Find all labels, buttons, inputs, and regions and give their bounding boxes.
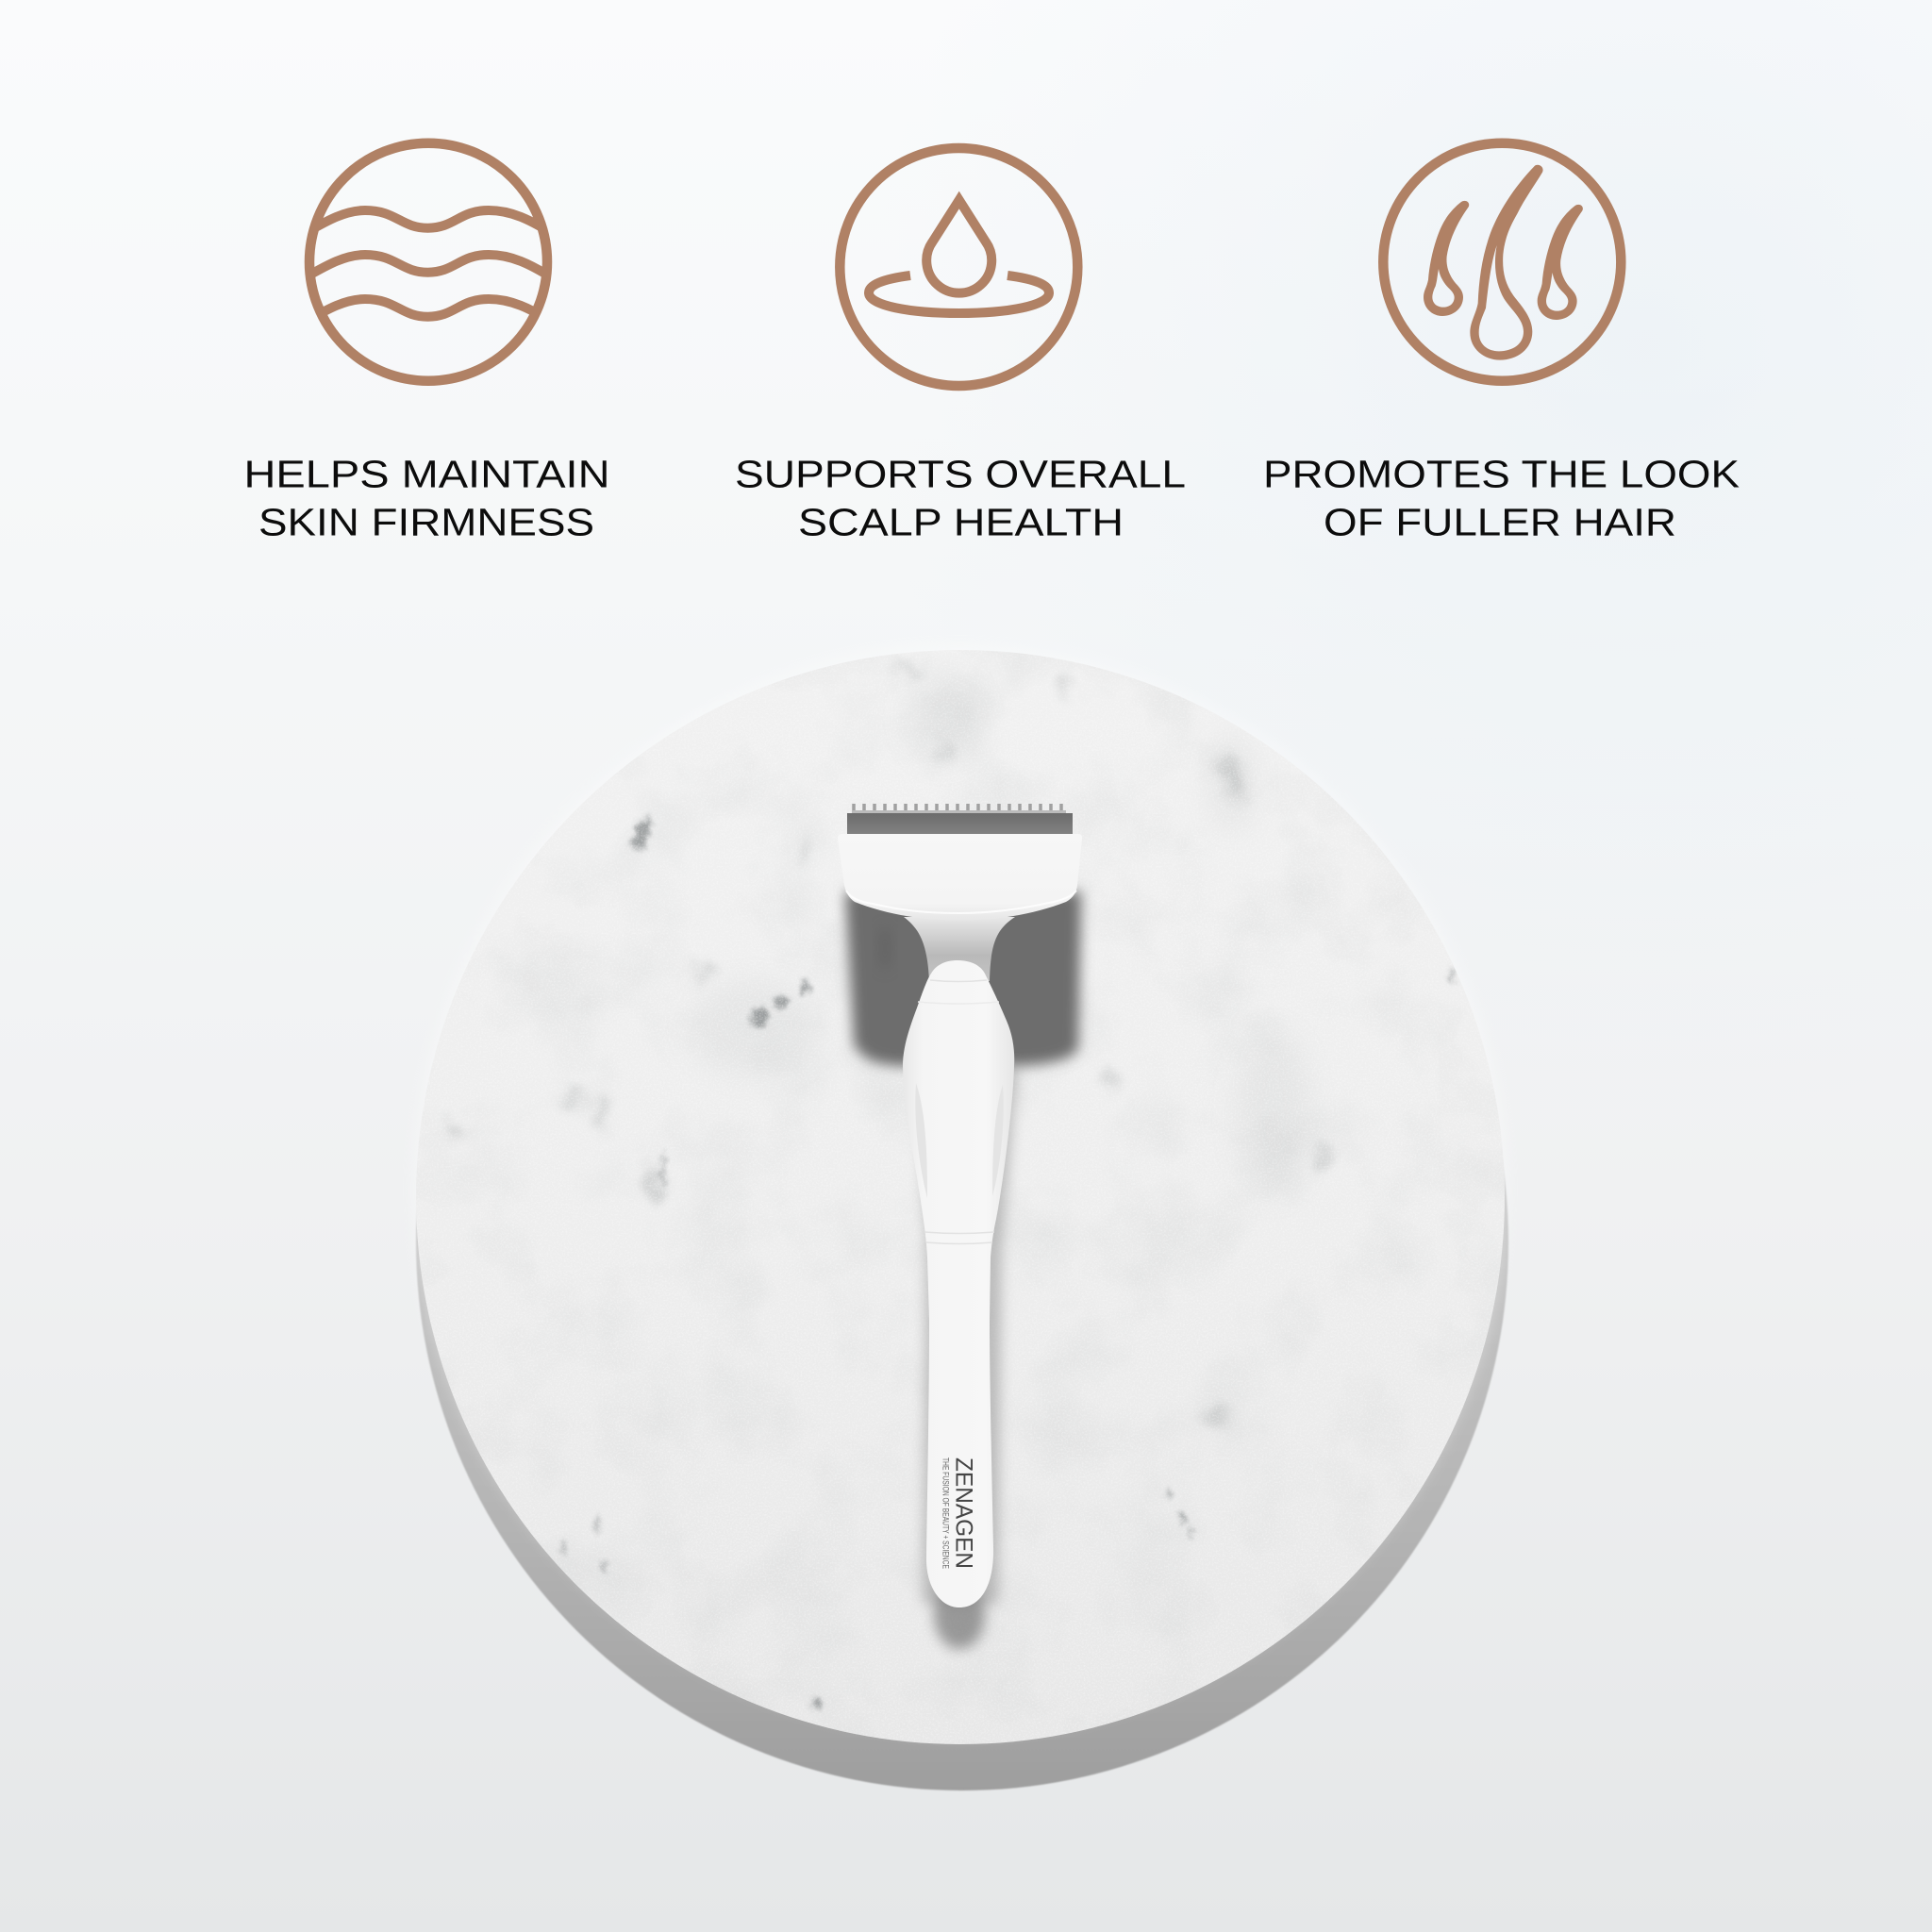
brand text on handle: THE FUSION OF BEAUTY + SCIENCE — [941, 1457, 951, 1569]
label: supports overall scalp health — [735, 453, 1186, 544]
disc face — [416, 650, 1505, 1744]
label: supports overall scalp health: SUPPORTS OVERALL — [735, 453, 1186, 496]
shadow below the handle tip — [934, 1581, 985, 1649]
label: promotes the look of fuller hair: OF FULLER HAIR — [1324, 501, 1676, 544]
icon: hair follicles in a circle — [1383, 143, 1621, 381]
handle — [903, 960, 1014, 1607]
head bevel — [846, 891, 1076, 913]
label: promotes the look of fuller hair — [1263, 453, 1740, 544]
glow around the disc top — [413, 645, 1507, 1736]
icon: waves in a circle — [304, 143, 553, 381]
disc side and cast shadow — [416, 694, 1508, 1790]
shadow behind the head — [845, 891, 1081, 1066]
icon: droplet with ripple in a circle — [840, 148, 1077, 386]
head — [838, 834, 1082, 921]
label: helps maintain skin firmness — [243, 453, 609, 544]
vein inside shadow — [879, 925, 891, 971]
label: promotes the look of fuller hair: PROMOTES THE LOOK — [1263, 453, 1740, 496]
blade bar — [847, 813, 1073, 835]
label: helps maintain skin firmness: HELPS MAINTAIN — [243, 453, 609, 496]
shadow of the handle — [917, 1066, 1018, 1604]
roller tool — [838, 804, 1082, 1649]
label: helps maintain skin firmness: SKIN FIRMNESS — [258, 501, 594, 544]
needle teeth — [852, 804, 1066, 814]
neck — [904, 917, 1015, 981]
brand text on handle: ZENAGEN — [950, 1457, 976, 1569]
handle details — [915, 980, 1004, 1243]
marble disc — [406, 641, 1519, 1790]
marble veins and grain — [445, 653, 1457, 1713]
label: supports overall scalp health: SCALP HEALTH — [798, 501, 1124, 544]
